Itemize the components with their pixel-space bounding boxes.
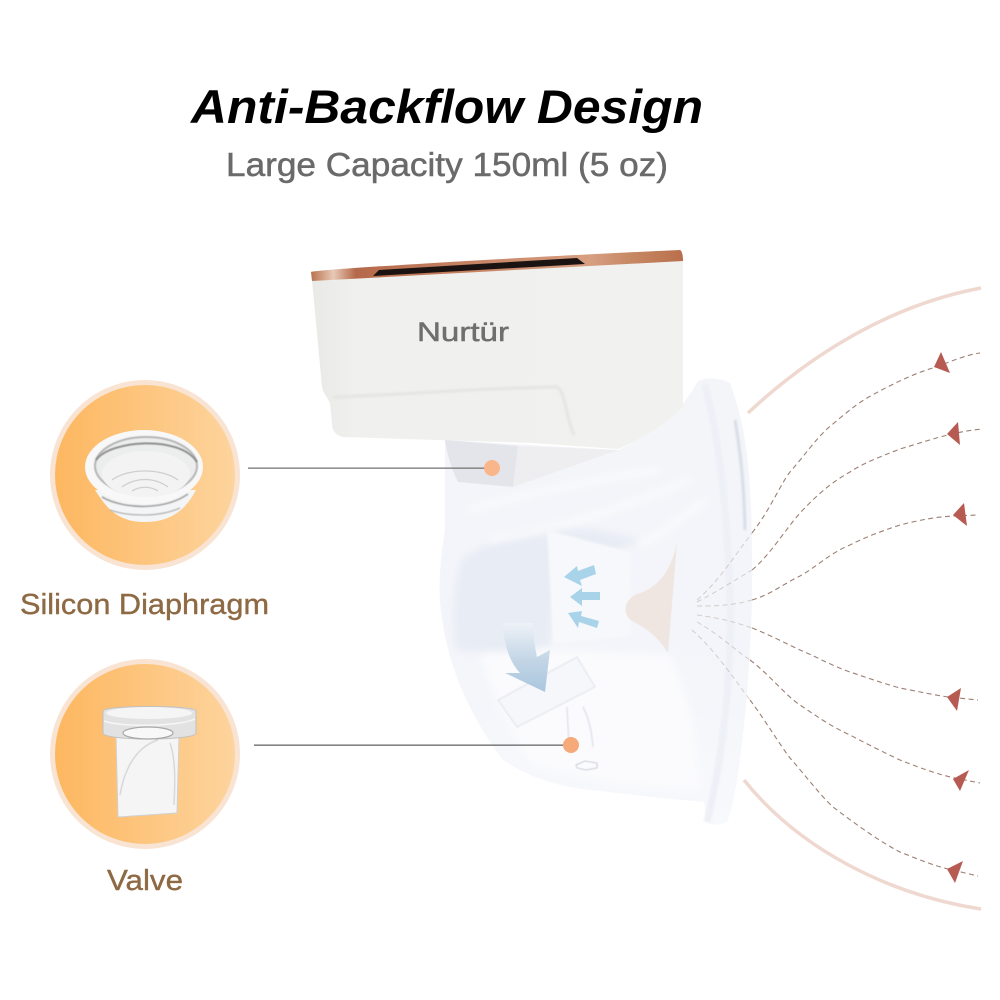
lower milk bowl highlight xyxy=(480,650,700,790)
duckbill valve inside xyxy=(498,657,597,770)
black screen strip xyxy=(373,258,585,276)
faint flow lines through flange xyxy=(692,533,752,700)
panel: pump product xyxy=(311,250,752,825)
subtitle: Large Capacity 150ml (5 oz) xyxy=(226,146,668,183)
dashed milk flow lines xyxy=(750,353,983,876)
icon: big curved arrow xyxy=(503,623,550,692)
breast outline curves xyxy=(744,288,981,909)
panel: valve callout xyxy=(50,659,240,897)
inner chamber xyxy=(454,529,640,652)
flow arrowheads xyxy=(934,352,969,883)
bottle body xyxy=(440,379,752,825)
icon: small blue arrows xyxy=(564,565,600,628)
panel: diaphragm callout xyxy=(20,380,269,621)
leader line and dot: valve xyxy=(254,737,579,753)
circle backdrop: silicon diaphragm xyxy=(50,380,240,570)
title: Anti-Backflow Design xyxy=(190,80,703,133)
circle backdrop: valve xyxy=(50,659,240,849)
diaphragm holder xyxy=(445,440,618,487)
top unit body xyxy=(312,260,683,449)
leader line and dot: diaphragm xyxy=(248,460,500,476)
valve label: Valve xyxy=(107,865,183,897)
icon: valve xyxy=(103,706,196,817)
upper translucent ripples xyxy=(470,470,705,545)
flange shadow xyxy=(735,420,745,530)
top unit ledge xyxy=(333,387,574,435)
silicon diaphragm label: Silicon Diaphragm xyxy=(20,589,269,621)
copper rim xyxy=(311,250,683,281)
icon: silicon diaphragm xyxy=(85,430,203,522)
inner pipe box xyxy=(547,530,631,644)
brand logo: Nurtür xyxy=(417,317,509,347)
nipple xyxy=(626,543,677,653)
flange inner edge xyxy=(705,385,730,822)
